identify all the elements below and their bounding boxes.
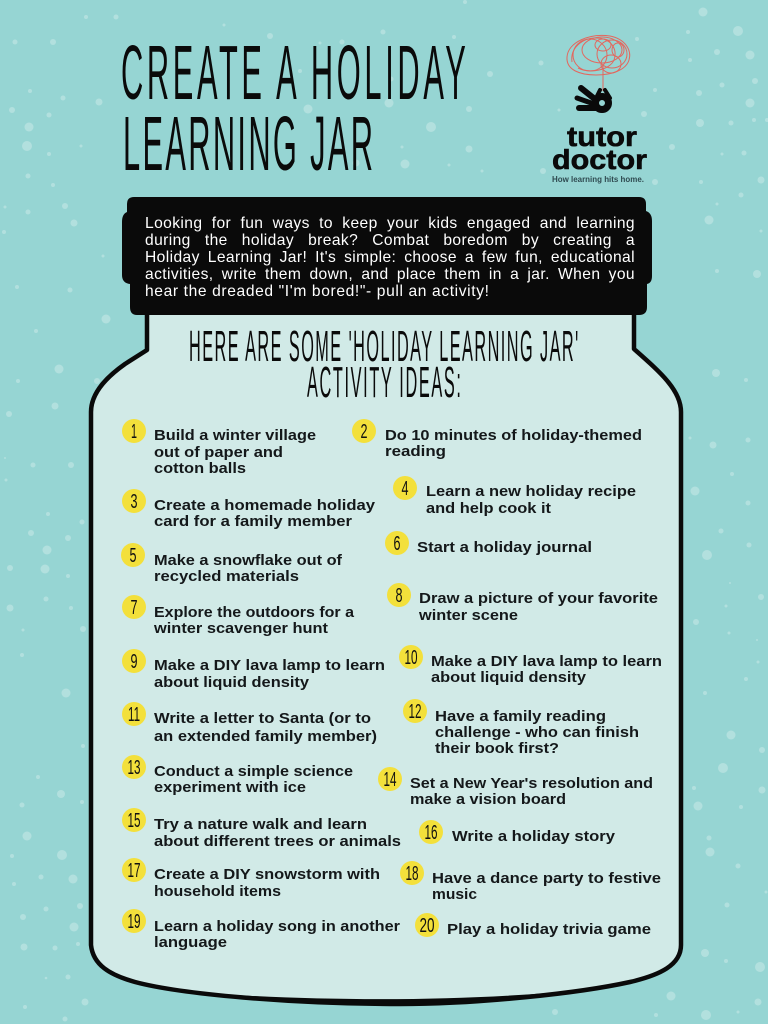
activity 12: Have a family reading bbox=[435, 708, 606, 725]
heading: activity ideas: HERE ARE SOME 'HOLIDAY LEARNING JAR' bbox=[189, 323, 578, 372]
activity 14: Set a New Year's resolution and bbox=[410, 775, 653, 792]
icon: hand bbox=[577, 88, 610, 110]
activity 18: Have a dance party to festive bbox=[432, 870, 661, 887]
jar bottom shading bbox=[190, 989, 590, 1005]
activity 6 bbox=[385, 531, 592, 556]
activity 4: 4 bbox=[402, 478, 408, 500]
activity 1: cotton balls bbox=[154, 460, 246, 477]
title: CREATE A HOLIDAY bbox=[121, 31, 466, 116]
activity 2: Do 10 minutes of holiday-themed bbox=[385, 427, 642, 444]
activity 10: Make a DIY lava lamp to learn bbox=[431, 653, 662, 670]
intro text block: Holiday Learning Jar! It's simple: choose a few fun, educational bbox=[145, 249, 635, 266]
activity 15: Try a nature walk and learn bbox=[154, 816, 367, 833]
activity 7: 7 bbox=[130, 597, 138, 619]
activity 6: 6 bbox=[394, 533, 400, 555]
activity 15: about different trees or animals bbox=[154, 833, 401, 850]
activity 17 bbox=[122, 858, 380, 900]
activity 14: make a vision board bbox=[410, 791, 566, 808]
logo wordmark second line: doctor bbox=[552, 144, 647, 175]
intro text block: hear the dreaded "I'm bored!"- pull an activity! bbox=[145, 283, 490, 300]
activity 8 bbox=[387, 583, 658, 624]
activity 14 bbox=[378, 767, 653, 808]
activity 11: Write a letter to Santa (or to bbox=[154, 710, 371, 727]
heading: activity ideas: ACTIVITY IDEAS: bbox=[307, 359, 461, 408]
activity 4 bbox=[393, 476, 636, 517]
activity 3: 3 bbox=[130, 491, 138, 513]
activity 4: Learn a new holiday recipe bbox=[426, 483, 636, 500]
activity 2: reading bbox=[385, 443, 446, 460]
activity 10: 10 bbox=[404, 647, 418, 669]
activity 5: 5 bbox=[130, 545, 136, 567]
activity 11 bbox=[122, 702, 377, 745]
activity 8: winter scene bbox=[418, 607, 518, 624]
activity 13: Conduct a simple science bbox=[154, 763, 353, 780]
activity 7 bbox=[122, 595, 355, 637]
activity 12 bbox=[403, 699, 639, 757]
activity 6: Start a holiday journal bbox=[417, 539, 592, 556]
logo tagline: How learning hits home. bbox=[552, 174, 644, 184]
activity 17: Create a DIY snowstorm with bbox=[154, 866, 380, 883]
heading: activity ideas bbox=[189, 323, 578, 408]
logo: tutor doctor bbox=[552, 35, 647, 184]
activity 18 bbox=[400, 861, 661, 903]
activity 20: Play a holiday trivia game bbox=[447, 921, 651, 938]
activity 15 bbox=[122, 808, 401, 850]
activity 17: 17 bbox=[128, 860, 140, 882]
intro text block: activities, write them down, and place them in a jar. When you bbox=[145, 266, 635, 283]
intro text block: during the holiday break? Combat boredom by creating a bbox=[145, 232, 635, 249]
activity 19 bbox=[122, 909, 400, 951]
activity 1: Build a winter village bbox=[154, 427, 316, 444]
activity 19: 19 bbox=[128, 911, 140, 933]
activity 4: and help cook it bbox=[426, 500, 551, 517]
activity 9: 9 bbox=[130, 651, 138, 673]
activity 19: Learn a holiday song in another bbox=[154, 918, 400, 935]
jar body bbox=[91, 312, 681, 1004]
activity 9 bbox=[122, 649, 385, 691]
activity 20: 20 bbox=[420, 915, 434, 937]
activity 20 bbox=[415, 913, 651, 938]
activity 1: out of paper and bbox=[154, 444, 283, 461]
activity 11: 11 bbox=[128, 704, 140, 726]
activity 8: 8 bbox=[396, 585, 402, 607]
title: LEARNING JAR bbox=[123, 102, 373, 187]
activity 15: 15 bbox=[128, 810, 140, 832]
activity 18: 18 bbox=[406, 863, 418, 885]
activity 10: about liquid density bbox=[431, 669, 587, 686]
intro text block: Looking for fun ways to keep your kids engaged and learning bbox=[145, 215, 635, 232]
activity 7: Explore the outdoors for a bbox=[154, 604, 355, 621]
activity 12: their book first? bbox=[435, 740, 559, 757]
activity 16: Write a holiday story bbox=[452, 828, 616, 845]
activity 16: 16 bbox=[424, 822, 438, 844]
icon: brain scribble bbox=[567, 35, 630, 91]
title bbox=[121, 31, 466, 187]
activity 5: recycled materials bbox=[154, 568, 299, 585]
activity 7: winter scavenger hunt bbox=[153, 620, 328, 637]
activity 3: Create a homemade holiday bbox=[154, 497, 376, 514]
jar lid bbox=[122, 197, 652, 315]
activity 16 bbox=[419, 820, 616, 845]
activity 5 bbox=[121, 543, 343, 585]
activity 9: about liquid density bbox=[154, 674, 310, 691]
activity 12: challenge - who can finish bbox=[435, 724, 639, 741]
activity 3 bbox=[122, 489, 376, 530]
activity 18: music bbox=[432, 886, 477, 903]
activity 19: language bbox=[154, 934, 227, 951]
activity 1 bbox=[122, 419, 316, 477]
activity 14: 14 bbox=[384, 769, 396, 791]
intro text block bbox=[145, 215, 635, 300]
activity 1: 1 bbox=[131, 421, 137, 443]
activity 9: Make a DIY lava lamp to learn bbox=[154, 657, 385, 674]
activity 2 bbox=[352, 419, 642, 460]
activity 17: household items bbox=[154, 883, 281, 900]
activity 11: an extended family member) bbox=[154, 728, 377, 745]
logo wordmark: tutor bbox=[567, 121, 637, 152]
activity 8: Draw a picture of your favorite bbox=[419, 590, 658, 607]
activity 5: Make a snowflake out of bbox=[154, 552, 343, 569]
activity 3: card for a family member bbox=[154, 513, 352, 530]
activity 13: 13 bbox=[128, 757, 140, 779]
activity 10 bbox=[399, 645, 662, 686]
activity 2: 2 bbox=[360, 421, 368, 443]
activity 13: experiment with ice bbox=[154, 779, 306, 796]
activity 13 bbox=[122, 755, 353, 796]
activity 12: 12 bbox=[408, 701, 422, 723]
